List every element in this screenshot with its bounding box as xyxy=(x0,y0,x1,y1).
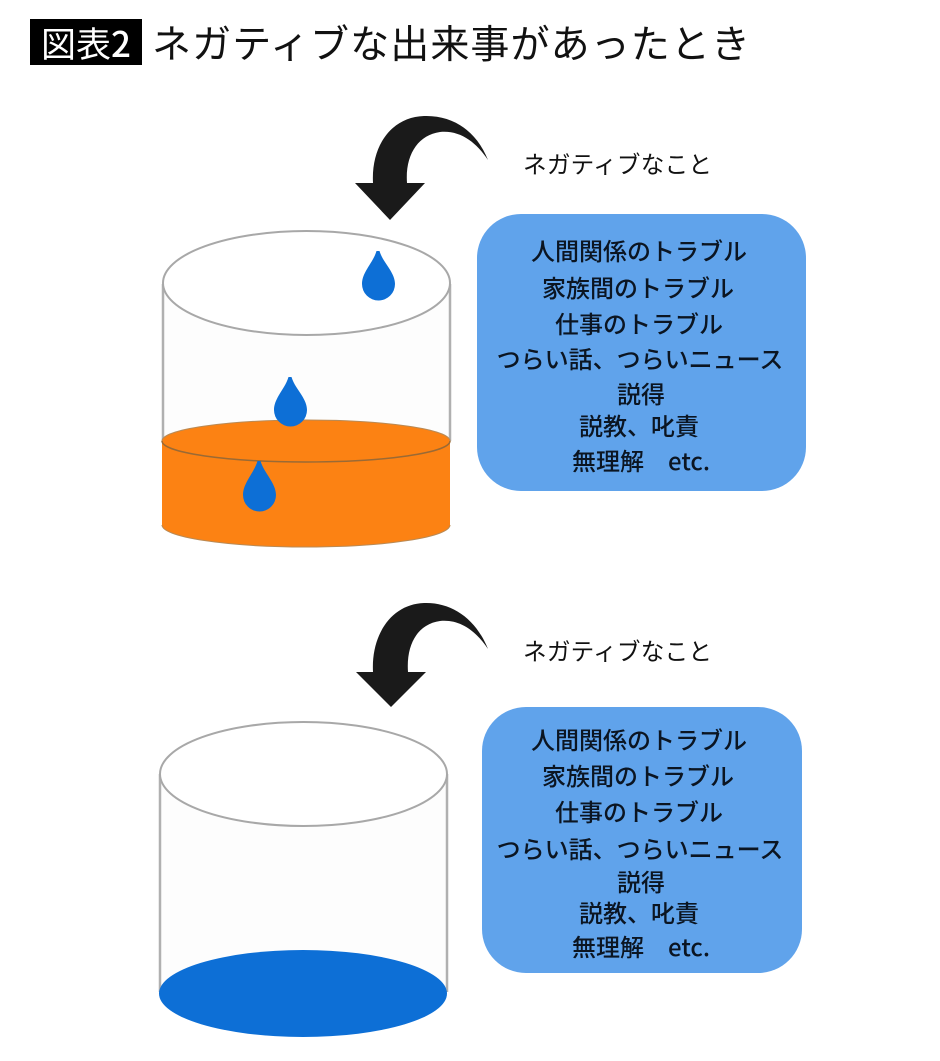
title text: ネガティブな出来事があったとき xyxy=(152,14,750,70)
list text: 無理解 etc. xyxy=(572,442,710,477)
list text: 無理解 etc. xyxy=(572,928,710,963)
list text: 人間関係のトラブル xyxy=(531,232,747,267)
list text xyxy=(497,721,783,963)
label: top negative things: ネガティブなこと xyxy=(523,146,712,180)
list text: 説得 xyxy=(617,375,665,410)
title xyxy=(30,14,750,70)
cylinder body xyxy=(160,774,447,992)
list text: 家族間のトラブル xyxy=(542,269,734,304)
cylinder rim xyxy=(160,722,447,826)
list text xyxy=(497,232,783,477)
list text: 家族間のトラブル xyxy=(542,757,734,792)
list text: 仕事のトラブル xyxy=(555,793,723,828)
list text: 説得 xyxy=(617,863,665,898)
list text: 仕事のトラブル xyxy=(555,305,723,340)
icon: water drop 1 xyxy=(362,251,395,300)
panel: top list box xyxy=(477,214,806,491)
orange liquid xyxy=(162,420,450,547)
cylinder body xyxy=(163,284,450,441)
cylinder rim xyxy=(163,231,450,335)
list text: 人間関係のトラブル xyxy=(531,721,747,756)
icon: water drop 2 xyxy=(274,377,307,427)
title badge: 図表2 xyxy=(41,17,131,68)
list text: つらい話、つらいニュース xyxy=(497,830,783,865)
list text: 説教、叱責 xyxy=(579,894,699,929)
list text: 説教、叱責 xyxy=(579,407,699,442)
arrow: bottom curved arrow xyxy=(356,603,488,707)
label: bottom negative things: ネガティブなこと xyxy=(523,633,712,667)
arrow: top curved arrow xyxy=(355,116,488,220)
panel: bottom list box xyxy=(482,707,802,973)
panel: bottom cylinder with blue base xyxy=(159,722,447,1037)
list text: つらい話、つらいニュース xyxy=(497,340,783,375)
panel: top cylinder with orange liquid xyxy=(162,231,450,547)
blue base xyxy=(159,950,447,1037)
icon: water drop 3 xyxy=(243,461,276,512)
